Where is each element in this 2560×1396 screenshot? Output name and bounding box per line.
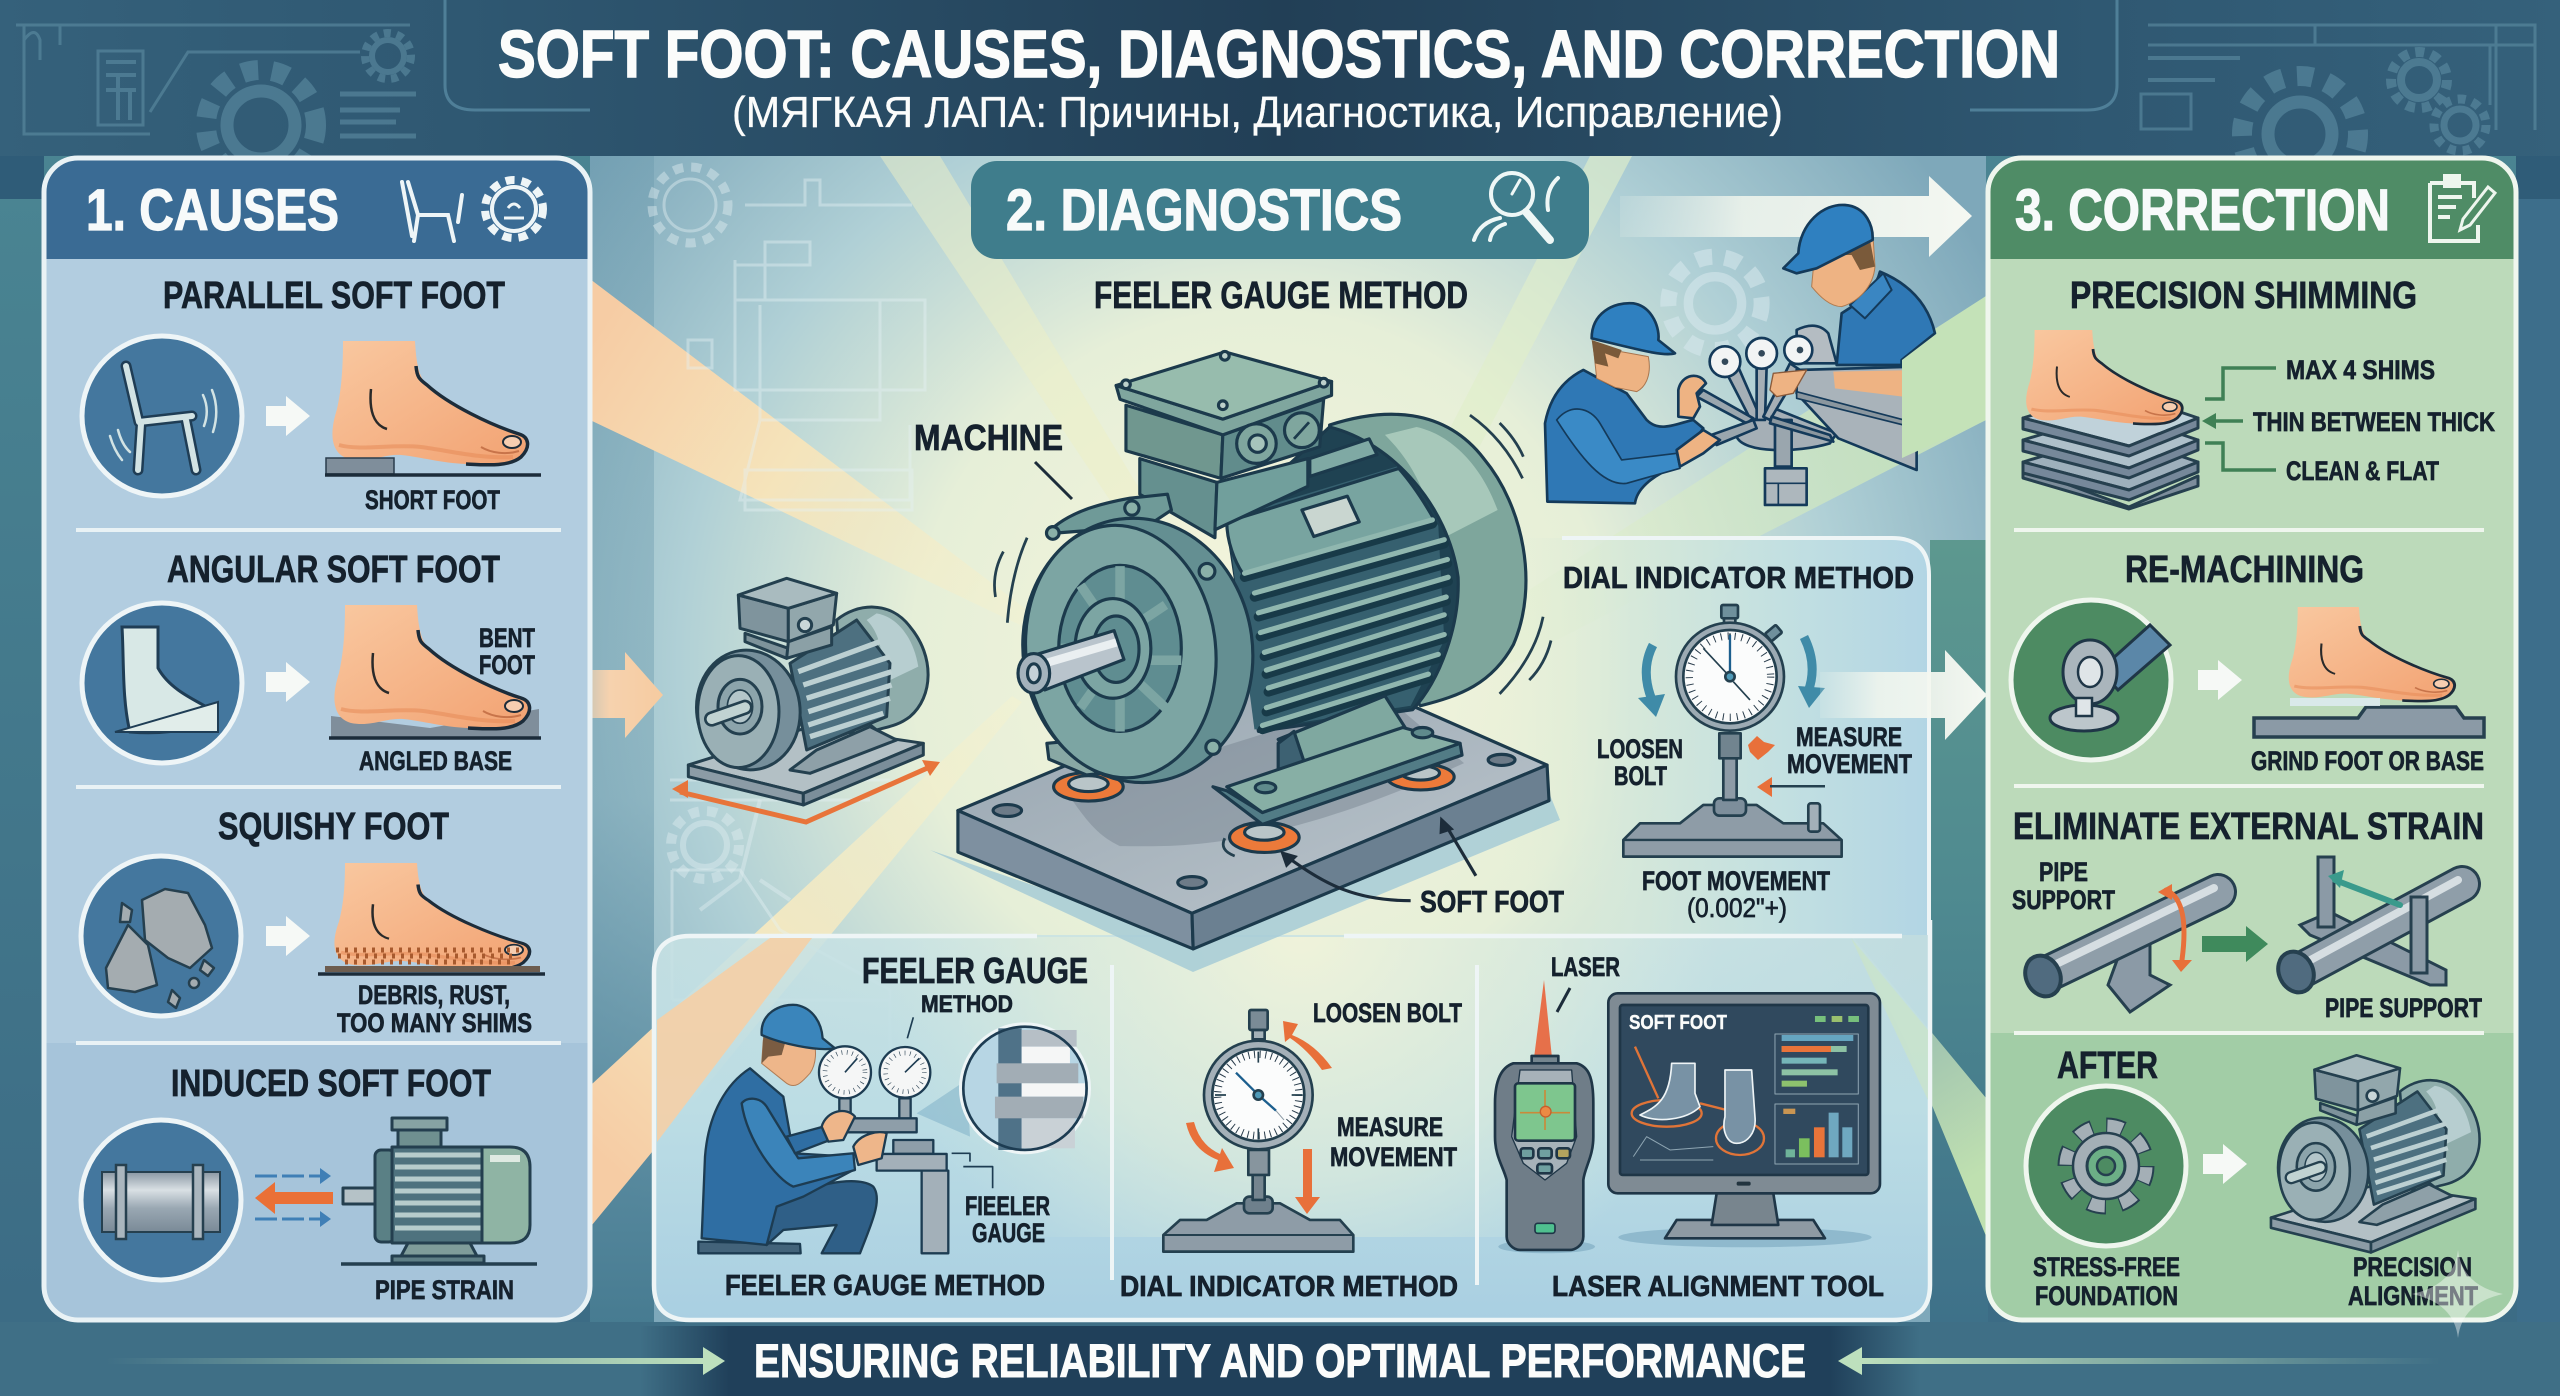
icon: magnifier [1474,173,1558,240]
orange arrows [1186,1021,1332,1214]
label: pipe support right: PIPE SUPPORT [2325,993,2482,1023]
small ghost gear [671,800,790,910]
leader lines [1280,816,1476,901]
base plate [958,662,1549,949]
label: parallel soft foot: PARALLEL SOFT FOOT [163,275,505,317]
subtitle: (МЯГКАЯ ЛАПА: Причины, Диагностика, Исправление) [732,88,1783,137]
label: pipe support left [2012,857,2115,915]
label: squishy foot: SQUISHY FOOT [218,806,449,848]
labels: loosen bolt: BOLT [1614,761,1667,791]
rear technician [1783,205,1935,365]
panel: correction [1988,158,2516,1320]
footer band [106,1326,2440,1396]
label: machine: MACHINE [914,417,1063,458]
caption: feeler gauge method: FEELER GAUGE METHOD [725,1270,1045,1302]
label: measure movement [1330,1112,1457,1172]
icon: foot on angled base [329,605,541,738]
panel: bottom diagnostics methods [653,920,1930,1320]
labels: shim rules: MAX 4 SHIMS [2286,355,2435,385]
arrow: causes to diagnostics [556,652,663,738]
footer text: ENSURING RELIABILITY AND OPTIMAL PERFORMANCE [754,1334,1806,1387]
title: SOFT FOOT: CAUSES, DIAGNOSTICS, AND CORRECTION [498,17,2060,92]
icon: foot with debris [318,863,545,974]
label: re-machining: RE-MACHINING [2125,549,2364,591]
arrow: center to correction, top [1620,176,1972,257]
icon: gear [485,180,543,238]
labels: measure movement: MEASURE [1796,722,1902,752]
arrow [2198,660,2242,700]
main motor illustration [958,351,1551,949]
panel: dial indicator method [1500,538,1929,935]
technicians with gauges [1545,205,1935,505]
label: stress-free foundation: STRESS-FREE [2033,1252,2180,1282]
teal arrows [1638,637,1825,717]
label: fieeler gauge [965,1191,1050,1248]
zoomed feeler gap [962,1025,1088,1152]
handheld laser device [1495,1056,1595,1253]
label: feeler gauge method: FEELER GAUGE METHOD [1094,275,1468,317]
label: monitor soft foot: SOFT FOOT [1629,1012,1727,1034]
footer arrow left [106,1347,725,1375]
causes heading: 1. CAUSES [86,178,339,243]
label: debris rust: TOO MANY SHIMS [337,1008,532,1038]
label: precision alignment: PRECISION [2353,1252,2472,1282]
label: debris rust: DEBRIS, RUST, [358,980,510,1010]
label: pipe strain: PIPE STRAIN [375,1275,514,1305]
dial gauge [1163,1010,1353,1252]
label: after: AFTER [2057,1045,2158,1087]
front soft foot pad [1230,822,1299,852]
precision shimming [2023,275,2495,509]
caption: laser alignment tool: LASER ALIGNMENT TOOL [1552,1271,1884,1303]
orange light band crossing panel [657,938,812,1142]
label: induced soft foot: INDUCED SOFT FOOT [171,1063,491,1105]
arrow [266,662,310,702]
label: fieeler gauge: FIEELER [965,1191,1050,1221]
bottom panel background [653,935,1930,1320]
arrow: diagnostics to correction, middle [1820,650,1987,740]
laser alignment tool [1495,952,1884,1303]
label: soft foot: SOFT FOOT [1420,884,1564,919]
laser beam [1534,980,1552,1058]
label: debris rust [337,980,532,1038]
arrow [266,916,310,956]
label: machine [914,417,1072,499]
icon: debris rocks [81,856,241,1016]
squishy foot [81,806,545,1038]
label: dial indicator method: DIAL INDICATOR METHOD [1563,560,1914,595]
dial indicator method [1120,998,1462,1303]
icon: bent foot on wedge [82,603,242,763]
icon: side motor [341,1118,537,1264]
causes panel background [44,158,590,1320]
technician with gauges [698,1005,993,1253]
label: fieeler gauge: GAUGE [972,1218,1045,1248]
orange movement arrows [672,760,940,822]
dial indicator gauge [1623,605,1842,857]
label: angled base: ANGLED BASE [359,746,512,776]
gauge manifold [1710,326,1837,505]
labels: measure movement: MOVEMENT [1787,749,1912,779]
icon: foot on short shim [325,341,541,475]
light rays [590,156,1986,1236]
arrow [266,396,310,436]
header decoration: right circuit drawing [2141,25,2535,192]
label: bent foot: FOOT [479,650,535,680]
blueprint line drawing [652,167,925,1090]
labels: shim rules: THIN BETWEEN THICK [2253,407,2495,437]
orange markers [1748,736,1825,797]
monitor [1608,993,1880,1247]
hand of rear technician [1770,370,1807,397]
cooling fins [1245,520,1448,729]
label: precision alignment [2348,1252,2478,1311]
label: pipe support left: PIPE [2039,857,2088,887]
mounting foot bracket [1213,727,1462,824]
shaft [1018,631,1124,693]
label: laser: LASER [1551,952,1620,982]
icon: wobbly chair [82,336,242,496]
panel: causes [44,158,590,1320]
labels: loosen bolt: LOOSEN [1597,734,1683,764]
front end bell [1006,494,1270,798]
labels: foot movement: FOOT MOVEMENT [1642,866,1830,896]
icon: foot on ground base [2254,607,2484,737]
header decoration: left circuit drawing [16,25,416,180]
label: grind foot or base: GRIND FOOT OR BASE [2251,746,2484,776]
label: angular soft foot: ANGULAR SOFT FOOT [167,549,500,591]
soft foot pads, rear [1054,764,1454,801]
dial panel background [1500,538,1929,935]
pedestal and brackets [1047,696,1413,779]
label: laser [1551,952,1620,1012]
junction box [1116,351,1332,478]
icon: stress-free gear [2026,1086,2186,1246]
icon: aligned motor [2271,1055,2480,1252]
rear fan cover [1330,414,1526,706]
label: stress-free foundation [2033,1252,2180,1311]
base plate shadow [930,790,1560,972]
icon: clipboard [2430,176,2495,241]
icon: foot on shim stack [2023,330,2198,509]
sparkle watermark [2412,1250,2503,1338]
icon: chair [402,182,462,241]
front technician [1545,303,1720,503]
labels: foot movement [1642,866,1830,923]
arrow [2203,1144,2247,1184]
labels: foot movement: (0.002"+) [1687,893,1787,923]
diagnostics heading: 2. DIAGNOSTICS [1006,178,1402,243]
shim callout leaders [2202,368,2276,470]
label: loosen bolt: LOOSEN BOLT [1313,998,1462,1028]
label: stress-free foundation: FOUNDATION [2035,1281,2178,1311]
label: bent foot: BENT [479,623,535,653]
label: method: METHOD [921,991,1013,1018]
feeler gauge method [698,950,1088,1302]
after [2026,1045,2480,1311]
label: feeler gauge: FEELER GAUGE [862,950,1088,991]
motor body dark back [1227,427,1458,731]
machine block [1697,367,1917,470]
icon: pipe [81,1120,241,1280]
panel: diagnostics heading tab [971,161,1589,259]
small motor on base [672,578,940,822]
labels: measure movement [1787,722,1912,779]
motor body [1227,467,1444,729]
header band [0,0,2560,199]
angular soft foot [82,549,541,776]
labels: shim rules: CLEAN & FLAT [2286,456,2439,486]
icon: supported pipe [2272,857,2462,998]
label: bent foot [479,623,535,680]
vibration marks [994,415,1551,856]
eliminate external strain [2012,806,2484,1023]
label: pipe support left: SUPPORT [2012,885,2115,915]
correction panel background [1988,158,2516,1320]
labels: loosen bolt [1597,734,1683,791]
icon: strained pipe [2019,884,2218,1012]
arrow [2202,926,2268,962]
label: measure movement: MOVEMENT [1330,1142,1457,1172]
strain arrows [255,1168,333,1227]
labels: shim rules [2253,355,2495,486]
caption: dial indicator method: DIAL INDICATOR METHOD [1120,1271,1458,1303]
neck [1140,439,1377,538]
label: precision shimming: PRECISION SHIMMING [2070,275,2417,317]
induced soft foot [81,1063,537,1305]
footer arrow right [1838,1347,2440,1375]
label: short foot: SHORT FOOT [365,485,500,515]
ghost gear behind technicians [1668,257,1762,350]
re-machining [2011,549,2484,776]
parallel soft foot [82,275,541,515]
correction heading: 3. CORRECTION [2015,178,2390,243]
icon: grinder [2011,600,2171,760]
green ray edge over machine block [1902,296,1986,458]
label: precision alignment: ALIGNMENT [2348,1281,2478,1311]
label: measure movement: MEASURE [1337,1112,1443,1142]
